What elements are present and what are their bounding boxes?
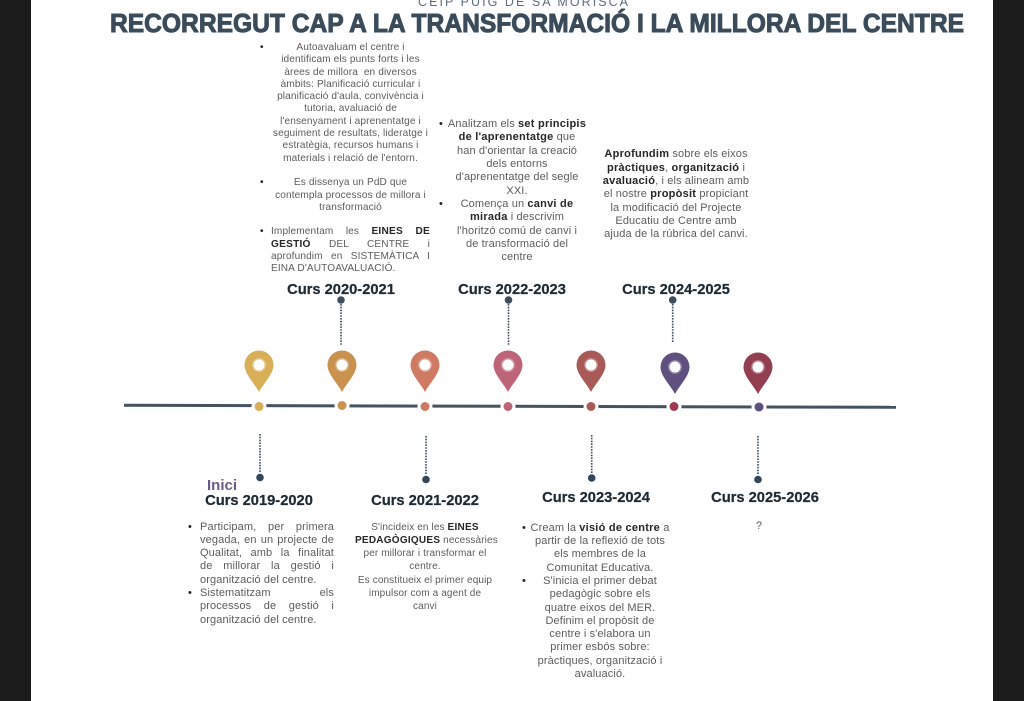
text: Curs 2019-2020 description: organització del centre. bbox=[200, 614, 317, 626]
text: Curs 2020-2021 description: Autoavaluam el centre i bbox=[296, 42, 405, 53]
text: Curs 2020-2021 description: transformació bbox=[319, 202, 382, 213]
bottom connector 2019-2020 bbox=[256, 434, 264, 481]
text: Curs 2023-2024 description: primer esbós sobre: bbox=[550, 641, 650, 653]
text: Curs 2024-2025 description: avaluació, i els alineam amb bbox=[603, 175, 749, 187]
text: Curs 2020-2021 description: materials i relació de l'entorn. bbox=[283, 153, 418, 164]
text: Curs 2019-2020 description: de millorar la gestió i bbox=[200, 560, 334, 572]
heading: Curs 2024-2025: Curs 2024-2025 bbox=[622, 282, 730, 298]
marker 1 bbox=[244, 350, 274, 414]
text: Curs 2020-2021 description: àrees de millora en diversos bbox=[284, 67, 417, 78]
text: Curs 2021-2022 description: per millorar i transformar el bbox=[364, 548, 486, 559]
text: Curs 2022-2023 description: • bbox=[439, 198, 443, 210]
text: Curs 2020-2021 description: àmbits: Planificació curricular i bbox=[281, 79, 420, 90]
text: Curs 2020-2021 description: aprofundim en SISTEMÀTICA I bbox=[271, 251, 430, 262]
main title: RECORREGUT CAP A LA TRANSFORMACIÓ I LA MILLORA DEL CENTRE bbox=[110, 8, 964, 38]
text: Curs 2021-2022 description: canvi bbox=[413, 601, 437, 612]
text: Curs 2019-2020 description: organització del centre. bbox=[200, 574, 317, 586]
text: Curs 2019-2020 description: • bbox=[188, 587, 192, 599]
heading: Curs 2023-2024: Curs 2023-2024 bbox=[542, 490, 650, 506]
marker 6 bbox=[660, 352, 690, 414]
text: Curs 2023-2024 description: Cream la visió de centre a bbox=[530, 522, 669, 534]
marker 4 bbox=[494, 350, 522, 414]
marker 7 bbox=[744, 352, 772, 414]
text: Curs 2021-2022 description: S'incideix en les EINES bbox=[371, 522, 479, 532]
right dark border bbox=[993, 0, 1024, 701]
text: Curs 2023-2024 description bbox=[522, 522, 670, 680]
left dark border bbox=[0, 0, 31, 701]
bottom connector 2025-2026 bbox=[754, 436, 762, 483]
text: Curs 2022-2023 description: dels entorns bbox=[486, 158, 548, 170]
text: Curs 2021-2022 description: PEDAGÒGIQUES necessàries bbox=[355, 535, 498, 546]
text: Curs 2024-2025 description: la modificació del Projecte bbox=[610, 202, 742, 214]
text: Curs 2023-2024 description: centre i s'elabora un bbox=[549, 628, 651, 640]
text: Curs 2022-2023 description: de transformació del bbox=[466, 238, 568, 250]
text: Curs 2022-2023 description: • bbox=[439, 118, 443, 130]
text: Curs 2023-2024 description: partir de la reflexió de tots bbox=[535, 535, 665, 547]
text: Curs 2020-2021 description: • bbox=[260, 42, 264, 53]
bottom connector 2021-2022 bbox=[422, 436, 430, 483]
text: Curs 2022-2023 description: mirada i descrivim bbox=[470, 211, 564, 223]
text: Curs 2022-2023 description: centre bbox=[501, 251, 533, 263]
text: Curs 2020-2021 description: • bbox=[260, 177, 264, 188]
text: Curs 2023-2024 description: avaluació. bbox=[575, 668, 625, 680]
text: Curs 2023-2024 description: quatre eixos del MER. bbox=[545, 602, 655, 614]
text: Curs 2020-2021 description: estratègia, recursos humans i bbox=[283, 140, 418, 151]
title block bbox=[110, 0, 964, 38]
heading: Curs 2020-2021: Curs 2020-2021 bbox=[287, 282, 395, 298]
text: Curs 2024-2025 description: Aprofundim sobre els eixos bbox=[604, 148, 748, 160]
text: Curs 2021-2022 description: Es constitueix el primer equip bbox=[358, 575, 492, 586]
heading: Curs 2021-2022: Curs 2021-2022 bbox=[371, 493, 479, 509]
text: Curs 2019-2020 description: processos de gestió i bbox=[200, 600, 334, 612]
main axis line bbox=[124, 405, 896, 407]
text: Curs 2022-2023 description: de l'aprenentatge que bbox=[459, 131, 575, 143]
top connector 2022-2023 bbox=[505, 296, 512, 345]
text: Curs 2019-2020 description: Sistematitzam els bbox=[200, 587, 334, 599]
timeline bbox=[124, 296, 896, 484]
text: Curs 2023-2024 description: S'inicia el primer debat bbox=[543, 575, 657, 587]
text: Curs 2022-2023 description: Analitzam els set principis bbox=[448, 118, 586, 130]
text: Curs 2020-2021 description: planificació d'aula, convivència i bbox=[277, 91, 424, 102]
marker 3 bbox=[410, 350, 440, 414]
text: Curs 2021-2022 description bbox=[355, 522, 498, 612]
text: Curs 2022-2023 description bbox=[439, 118, 586, 263]
text: Curs 2020-2021 description bbox=[260, 42, 430, 274]
text: Curs 2019-2020 description: Qualitat, amb la finalitat bbox=[200, 547, 334, 559]
text: Curs 2023-2024 description: pràctiques, organització i bbox=[538, 655, 662, 667]
heading: Curs 2025-2026: Curs 2025-2026 bbox=[711, 490, 819, 506]
text: Curs 2022-2023 description: d'aprenentatge del segle bbox=[455, 171, 579, 183]
text: Curs 2022-2023 description: Comença un canvi de bbox=[461, 198, 573, 210]
top connector 2020-2021 bbox=[337, 296, 345, 345]
text: Curs 2021-2022 description: centre. bbox=[409, 561, 441, 572]
text: Curs 2022-2023 description: l'horitzó comú de canvi i bbox=[457, 225, 577, 237]
text: Curs 2024-2025 description: el nostre propòsit propiciant bbox=[604, 188, 748, 200]
marker 5 bbox=[576, 350, 606, 414]
text: Curs 2025-2026 question mark: ? bbox=[756, 520, 762, 532]
text: Curs 2020-2021 description: GESTIÓ DEL CENTRE i bbox=[271, 239, 430, 250]
top connector 2024-2025 bbox=[669, 296, 676, 343]
text: Curs 2021-2022 description: impulsor com a agent de bbox=[369, 588, 481, 599]
heading: Curs 2022-2023: Curs 2022-2023 bbox=[458, 282, 566, 298]
text: Curs 2019-2020 description bbox=[188, 520, 334, 626]
text: Curs 2024-2025 description bbox=[603, 148, 749, 240]
text: Curs 2020-2021 description: tutoria, avaluació de bbox=[304, 103, 397, 114]
text: Curs 2023-2024 description: Definim el propòsit de bbox=[545, 615, 655, 627]
text: Curs 2024-2025 description: ajuda de la rúbrica del canvi. bbox=[604, 228, 748, 240]
text: Curs 2023-2024 description: els membres de la bbox=[554, 548, 646, 560]
text: Curs 2023-2024 description: pedagògic sobre els bbox=[550, 588, 650, 600]
marker 2 bbox=[328, 350, 356, 413]
text: Curs 2024-2025 description: pràctiques, organització i bbox=[607, 162, 745, 174]
text: Curs 2024-2025 description: Educatiu de Centre amb bbox=[615, 215, 737, 227]
text: Curs 2020-2021 description: EINA D'AUTOAVALUACIÓ. bbox=[271, 263, 395, 274]
bottom connector 2023-2024 bbox=[588, 435, 596, 482]
text: Curs 2020-2021 description: seguiment de resultats, lideratge i bbox=[273, 128, 428, 139]
text: Curs 2020-2021 description: Implementam les EINES DE bbox=[271, 226, 430, 237]
heading: Curs 2019-2020: Curs 2019-2020 bbox=[205, 493, 313, 509]
label: Inici: Inici bbox=[207, 477, 237, 494]
text: Curs 2020-2021 description: Es dissenya un PdD que bbox=[294, 177, 407, 188]
text: Curs 2023-2024 description: • bbox=[522, 522, 526, 534]
text: Curs 2020-2021 description: • bbox=[260, 226, 264, 237]
text: Curs 2019-2020 description: Participam, per primera bbox=[200, 520, 334, 532]
text: Curs 2023-2024 description: Comunitat Educativa. bbox=[547, 562, 653, 574]
text: Curs 2020-2021 description: l'ensenyament i aprenentatge i bbox=[280, 116, 421, 127]
text: Curs 2020-2021 description: identificam els punts forts i les bbox=[281, 54, 420, 65]
text: Curs 2022-2023 description: XXI. bbox=[506, 185, 528, 197]
text: Curs 2022-2023 description: han d'orientar la creació bbox=[457, 145, 577, 157]
text: Curs 2019-2020 description: vegada, en un projecte de bbox=[200, 534, 334, 546]
text: Curs 2020-2021 description: contempla processos de millora i bbox=[275, 190, 426, 201]
text: Curs 2019-2020 description: • bbox=[188, 520, 192, 532]
text: Curs 2023-2024 description: • bbox=[522, 575, 526, 587]
